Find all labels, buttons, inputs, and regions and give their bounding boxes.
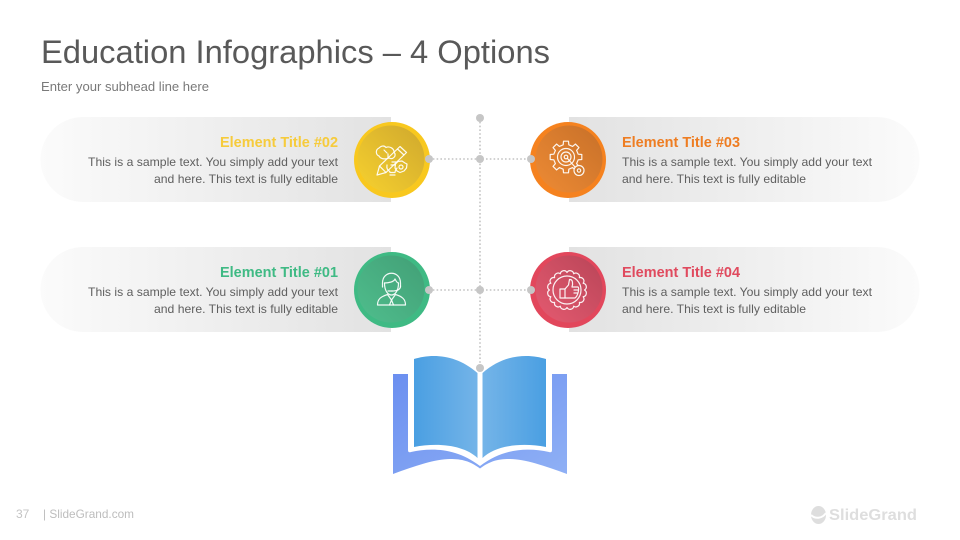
icon: gear and target on orange circle bbox=[530, 122, 606, 198]
element 02 text: This is a sample text. You simply add your text bbox=[88, 155, 339, 169]
element 01 text: This is a sample text. You simply add your text bbox=[88, 285, 339, 299]
element 03 text: This is a sample text. You simply add your text bbox=[622, 155, 873, 169]
right page bbox=[482, 356, 546, 458]
element 03 title: Element Title #03 bbox=[622, 134, 740, 151]
element 02 text bbox=[88, 155, 339, 186]
element 02 text: and here. This text is fully editable bbox=[154, 172, 338, 186]
element 03 text: and here. This text is fully editable bbox=[622, 172, 806, 186]
element 01 text: and here. This text is fully editable bbox=[154, 302, 338, 316]
connector nodes bbox=[425, 114, 535, 294]
book node bbox=[476, 364, 484, 372]
footer logo: SlideGrand bbox=[829, 507, 917, 524]
panel: element 04 bbox=[569, 247, 920, 332]
element 01 text bbox=[88, 285, 339, 316]
element 02 title: Element Title #02 bbox=[220, 134, 338, 151]
element 04 text: and here. This text is fully editable bbox=[622, 302, 806, 316]
panel: element 03 bbox=[569, 117, 920, 202]
element 04 text: This is a sample text. You simply add your text bbox=[622, 285, 873, 299]
footer page number: 37 bbox=[16, 507, 30, 521]
icon: open book bbox=[393, 356, 567, 474]
panel: element 01 bbox=[40, 247, 391, 332]
icon: support agent on green circle bbox=[354, 252, 430, 328]
panel: element 02 bbox=[40, 117, 391, 202]
element 04 text bbox=[622, 285, 873, 316]
element 03 text bbox=[622, 155, 873, 186]
book cover bbox=[393, 374, 567, 474]
element 01 title: Element Title #01 bbox=[220, 264, 338, 281]
footer site: | SlideGrand.com bbox=[43, 507, 134, 521]
icon: thumbs up badge on red circle bbox=[530, 252, 606, 328]
title: Education Infographics – 4 Options bbox=[41, 34, 550, 70]
subtitle: Enter your subhead line here bbox=[41, 80, 209, 94]
connector lines bbox=[429, 118, 531, 368]
left page bbox=[414, 356, 478, 458]
element 04 title: Element Title #04 bbox=[622, 264, 741, 281]
icon: pencil, brain and gear on yellow circle bbox=[354, 122, 430, 198]
